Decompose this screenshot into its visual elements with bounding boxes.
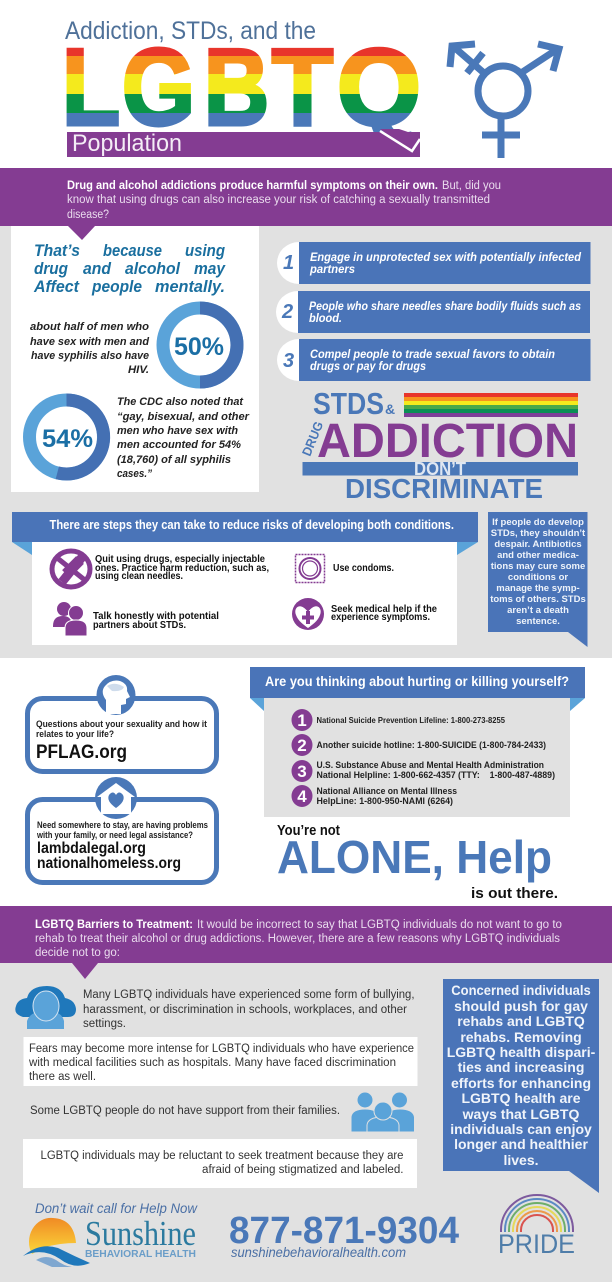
item 1: Engage in unprotected sex with potentially infected — [310, 252, 582, 264]
text: bullying — [83, 989, 414, 1030]
logo: Sunshine Behavioral Health — [23, 1201, 198, 1267]
panel: housing and legal help: nationalhomeless.org — [37, 855, 181, 872]
heading: you're not alone: ALONE, Help — [277, 831, 552, 883]
text: seek help: Seek medical help if the — [331, 603, 437, 615]
text: talk honestly: Talk honestly with potential — [93, 610, 219, 622]
callout: if people develop STDs: tions may cure some — [491, 561, 585, 572]
heading: STDs and drug addiction don't discriminate: & — [385, 401, 395, 417]
hotline 3: U.S. Substance Abuse and Mental Health Administration — [316, 760, 544, 770]
callout: concerned individuals: ties and increasing — [458, 1059, 584, 1075]
callout: concerned individuals: Concerned individuals — [451, 982, 591, 998]
icon: condom — [296, 554, 324, 582]
hotline 4: 4 — [297, 787, 307, 806]
text box: stigma — [23, 1139, 417, 1188]
callout: if people develop STDs: manage the symp- — [496, 583, 580, 594]
title: B — [204, 26, 269, 148]
heading: and — [83, 259, 112, 278]
panel: PFLAG: relates to your life? — [36, 729, 114, 740]
title: Population — [72, 130, 182, 157]
panel: barriers band: It would be incorrect to say that LGBTQ individuals do not want to go to — [197, 919, 562, 931]
panel: intro band — [0, 168, 612, 240]
heading: STDs and drug addiction don't discriminate: DON’T — [414, 459, 466, 479]
panel: barriers band: LGBTQ Barriers to Treatment: — [35, 919, 193, 931]
text: half of men: have sex with men and — [30, 336, 149, 348]
item 2 — [276, 291, 590, 333]
text box: medical fears: with medical facilities such as hospitals. Many have faced discrimination — [28, 1057, 396, 1069]
panel: steps to reduce risk — [12, 512, 478, 645]
callout: if people develop STDs: If people do develop — [492, 517, 584, 528]
icon: head — [96, 675, 136, 715]
icon: two people — [53, 602, 87, 636]
phone number and website: sunshinebehavioralhealth.com — [231, 1244, 406, 1260]
panel: barriers band — [0, 906, 612, 979]
pointer — [68, 226, 95, 240]
phone number and website: 877-871-9304 — [229, 1210, 459, 1252]
callout: concerned individuals: efforts for enhancing — [451, 1075, 591, 1091]
item 3: drugs or pay for drugs — [310, 361, 426, 373]
callout: if people develop STDs — [488, 512, 588, 647]
heading: people — [91, 277, 142, 296]
hotline 2: Another suicide hotline: 1-800-SUICIDE (1-800-784-2433) — [316, 740, 546, 750]
callout: if people develop STDs: aren’t a death — [507, 605, 569, 616]
hotline 1: National Suicide Prevention Lifeline: 1-800-273-8255 — [316, 716, 506, 725]
list: three risks — [276, 242, 590, 381]
icon: transgender symbol — [450, 44, 559, 158]
heading: you're not alone: You’re not — [277, 822, 340, 839]
panel: crisis hotlines: Are you thinking about hurting or killing yourself? — [265, 673, 569, 689]
icon: medical heart — [292, 598, 324, 630]
hotline 3: National Helpline: 1-800-662-4357 (TTY: 1-800-487-4889) — [316, 770, 555, 780]
heading: STDs and drug addiction don't discriminate: ADDICTION — [317, 415, 578, 468]
text: quit drugs: ones. Practice harm reduction, such as, — [95, 562, 269, 574]
title: T — [272, 26, 333, 148]
icon: no drugs — [52, 551, 90, 587]
item 3: 3 — [283, 350, 294, 372]
rainbow bar — [404, 393, 578, 417]
item 1 — [277, 242, 590, 284]
heading — [33, 241, 226, 296]
text: seek help — [331, 603, 437, 623]
text box: medical fears: Fears may become more intense for LGBTQ individuals who have experience — [29, 1043, 414, 1055]
panel: intro band: But, did you — [442, 180, 501, 192]
heading: That’s — [34, 241, 80, 260]
text: use condoms: Use condoms. — [333, 562, 394, 574]
item 2: 2 — [281, 301, 293, 323]
item 3 — [277, 339, 590, 381]
chart: 50 percent ring: 50% — [174, 333, 224, 361]
text: CDC note — [117, 396, 250, 480]
text: CDC note: cases.” — [117, 468, 152, 480]
panel: housing and legal help — [28, 777, 216, 882]
callout: if people develop STDs: conditions or — [508, 572, 568, 583]
text: CDC note: men who have sex with — [117, 425, 238, 437]
icon: pride rainbow — [498, 1195, 575, 1259]
title: Addiction, STDs, and the — [65, 17, 316, 45]
heading: mentally. — [155, 277, 225, 296]
text: CDC note: (18,760) of all syphilis — [117, 454, 231, 466]
heading: drug — [34, 259, 69, 278]
hotline 2: 2 — [297, 736, 307, 755]
callout: concerned individuals: ways that LGBTQ — [462, 1106, 579, 1122]
text: half of men: have syphilis also have — [31, 350, 149, 362]
hotline 4: HelpLine: 1-800-950-NAMI (6264) — [316, 796, 453, 806]
item 3: Compel people to trade sexual favors to obtain — [310, 349, 555, 361]
text box: stigma: LGBTQ individuals may be reluctant to seek treatment because they are — [40, 1150, 404, 1162]
logo: Sunshine Behavioral Health: BEHAVIORAL HEALTH — [85, 1249, 196, 1260]
callout: if people develop STDs: STDs, they shouldn’t — [491, 528, 586, 539]
hotline 3: 3 — [297, 762, 307, 781]
heading: STDs and drug addiction don't discriminate: STDS — [313, 386, 384, 421]
text: CDC note: men accounted for 54% — [117, 439, 241, 451]
callout: concerned individuals — [443, 979, 599, 1193]
icon: person under cloud — [15, 986, 76, 1029]
callout: concerned individuals: should push for gay — [454, 998, 588, 1014]
callout: concerned individuals: lives. — [503, 1152, 539, 1168]
callout: concerned individuals: rehabs. Removing — [460, 1029, 582, 1045]
heading: STDs and drug addiction don't discriminate: DISCRIMINATE — [345, 473, 543, 504]
heading: because — [103, 241, 162, 260]
title: Q — [337, 26, 421, 148]
text: bullying: harassment, or discrimination in schools, workplaces, and other — [83, 1004, 407, 1016]
heading: using — [185, 241, 226, 260]
logo: Sunshine Behavioral Health: Sunshine — [85, 1214, 196, 1253]
chart: 50 percent ring — [163, 308, 237, 382]
text: seek help: experience symptoms. — [331, 611, 430, 623]
heading: may — [194, 259, 226, 278]
hotline 2 — [292, 734, 546, 756]
hotline 1 — [292, 709, 506, 731]
panel: mental effects — [11, 226, 259, 492]
heading: alcohol — [125, 259, 181, 278]
text: quit drugs: Quit using drugs, especially injectable — [95, 553, 265, 565]
text: half of men — [30, 321, 149, 376]
chart: 54 percent ring: 54% — [42, 425, 93, 453]
callout: if people develop STDs: and other medica- — [497, 550, 579, 561]
text: talk honestly — [93, 610, 219, 631]
item 1: 1 — [283, 252, 294, 274]
logo: Sunshine Behavioral Health: Don’t wait call for Help Now — [35, 1201, 198, 1216]
callout: if people develop STDs: sentence. — [516, 616, 560, 627]
item 2: blood. — [309, 313, 342, 325]
heading: you're not alone: is out there. — [471, 885, 558, 902]
text: half of men: about half of men who — [30, 321, 149, 333]
panel: housing and legal help: Need somewhere to stay, are having problems — [37, 820, 208, 830]
panel: PFLAG — [28, 675, 216, 772]
title: G — [122, 26, 195, 148]
callout: concerned individuals: individuals can enjoy — [450, 1121, 592, 1137]
text box: medical fears — [24, 1037, 418, 1086]
hotline 4 — [292, 785, 457, 807]
panel: barriers band: decide not to go: — [35, 947, 120, 959]
callout: if people develop STDs: toms of others. STDs — [490, 594, 586, 605]
panel: barriers band: rehab to treat their alcohol or drug addictions. However, there are a few reasons why LGBTQ individuals — [35, 933, 560, 945]
icon: house with heart — [95, 777, 137, 819]
text box: stigma: afraid of being stigmatized and labeled. — [202, 1164, 404, 1176]
panel: housing and legal help: with your family, or need legal assistance? — [36, 830, 193, 840]
chart: 54 percent ring — [30, 400, 104, 474]
panel: intro band: know that using drugs can also increase your risk of catching a sexually transmitted — [67, 194, 490, 206]
panel: intro band: Drug and alcohol addictions produce harmful symptoms on their own. — [67, 180, 438, 192]
heading: Affect — [33, 277, 80, 296]
panel: steps to reduce risk: There are steps they can take to reduce risks of developing both conditions. — [50, 517, 454, 532]
text: half of men: HIV. — [128, 364, 149, 376]
item 2: People who share needles share bodily fluids such as — [309, 301, 581, 313]
callout: concerned individuals: LGBTQ health dispari- — [447, 1044, 596, 1060]
text: quit drugs — [95, 553, 269, 582]
title — [62, 17, 421, 157]
icon: family group — [351, 1092, 414, 1132]
text: quit drugs: using clean needles. — [95, 570, 183, 582]
text: CDC note: “gay, bisexual, and other — [117, 411, 250, 423]
panel: crisis hotlines — [250, 667, 585, 817]
heading: STDs and drug addiction don't discriminate: DRUG — [299, 419, 326, 458]
callout: concerned individuals: LGBTQ health are — [461, 1090, 581, 1106]
heading: you're not alone — [277, 822, 558, 902]
text: bullying: settings. — [83, 1018, 126, 1030]
text: CDC note: The CDC also noted that — [117, 396, 244, 408]
panel: PFLAG: PFLAG.org — [36, 742, 127, 763]
panel: PFLAG: Questions about your sexuality and how it — [36, 719, 208, 730]
text: talk honestly: partners about STDs. — [93, 619, 186, 631]
text: bullying: Many LGBTQ individuals have experienced some form of bullying, — [83, 989, 414, 1001]
hotline 3 — [292, 760, 555, 782]
icon: pride rainbow: PRIDE — [498, 1229, 575, 1259]
callout: concerned individuals: rehabs and LGBTQ — [457, 1013, 585, 1029]
panel: housing and legal help: lambdalegal.org — [37, 840, 146, 857]
text box: medical fears: there as well. — [29, 1071, 96, 1083]
hotline 4: National Alliance on Mental Illness — [316, 786, 457, 796]
callout: concerned individuals: longer and healthier — [454, 1136, 588, 1152]
callout: if people develop STDs: despair. Antibiotics — [494, 539, 582, 550]
item 1: partners — [309, 264, 355, 276]
text: family support: Some LGBTQ people do not have support from their families. — [30, 1105, 340, 1117]
panel: intro band: disease? — [67, 209, 109, 221]
hotline 1: 1 — [297, 711, 307, 730]
title: L — [62, 26, 120, 148]
heading: STDs and drug addiction don't discriminate — [299, 386, 578, 504]
